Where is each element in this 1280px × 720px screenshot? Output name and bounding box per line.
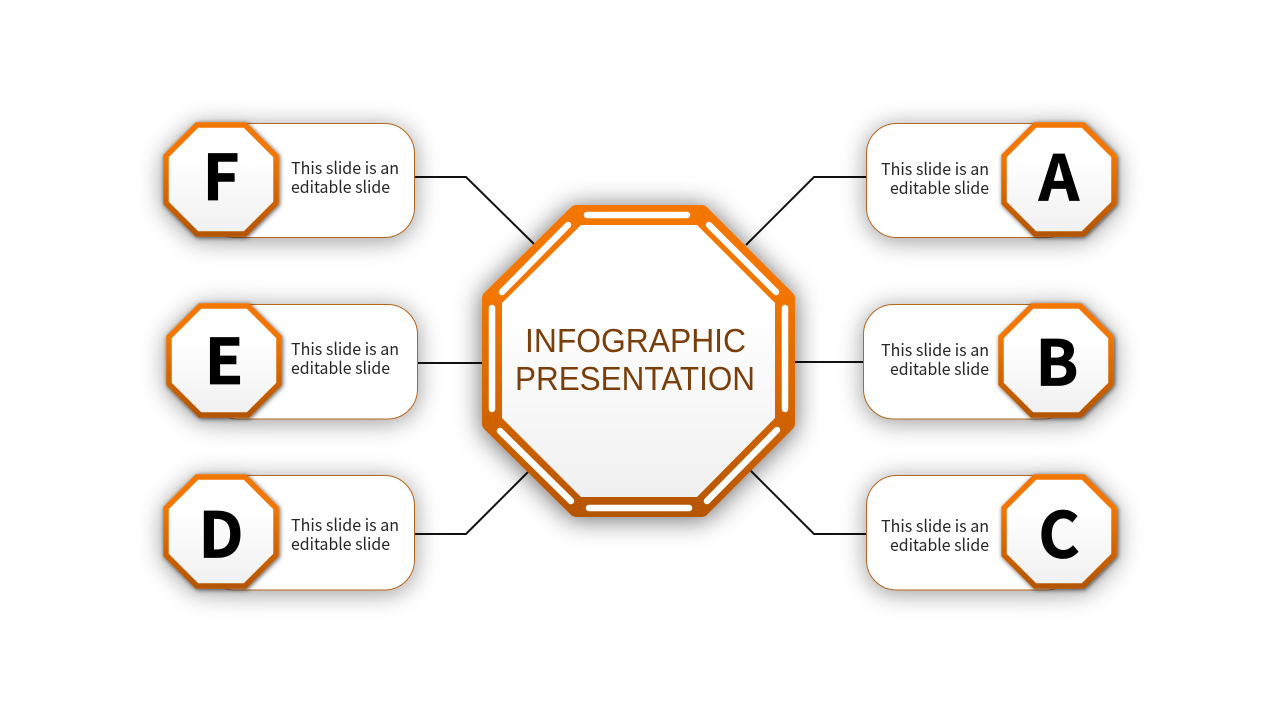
text D: editable slide	[291, 531, 390, 555]
text E: editable slide	[291, 355, 390, 379]
panel: B	[864, 304, 1111, 419]
card and badge F	[166, 124, 414, 238]
letter C: C	[1038, 486, 1080, 576]
card and badge A	[866, 124, 1114, 238]
panel: E	[169, 304, 418, 419]
central octagon	[490, 213, 787, 509]
letter A: A	[1038, 128, 1080, 220]
panel: F	[166, 124, 414, 238]
panel: A	[866, 124, 1114, 238]
center title: PRESENTATION	[515, 361, 755, 398]
connector F	[415, 177, 534, 244]
panel: C	[866, 476, 1114, 590]
text B: This slide is an	[881, 337, 989, 361]
text A: editable slide	[890, 175, 989, 199]
letter E: E	[205, 312, 243, 403]
letter F: F	[203, 128, 239, 219]
card and badge B	[864, 304, 1111, 419]
connector B	[793, 361, 864, 363]
octagon inner face	[502, 225, 775, 497]
card and badge E	[169, 304, 418, 419]
text E: This slide is an	[291, 336, 399, 360]
connector A	[746, 177, 867, 245]
text F: editable slide	[291, 174, 390, 198]
card and badge D	[166, 476, 414, 590]
text C: editable slide	[890, 532, 989, 556]
connector D	[415, 472, 528, 534]
letter B: B	[1036, 314, 1078, 404]
white ring segments	[492, 215, 785, 508]
text D: This slide is an	[291, 512, 399, 536]
text F: This slide is an	[291, 155, 399, 179]
text A: This slide is an	[881, 156, 989, 180]
connector C	[750, 470, 867, 534]
connector E	[417, 362, 484, 364]
panel: D	[166, 476, 414, 590]
text B: editable slide	[890, 356, 989, 380]
text C: This slide is an	[881, 513, 989, 537]
card and badge C	[866, 476, 1114, 590]
letter D: D	[199, 486, 243, 576]
octagon ring	[490, 213, 787, 509]
center title: INFOGRAPHIC	[525, 323, 746, 360]
